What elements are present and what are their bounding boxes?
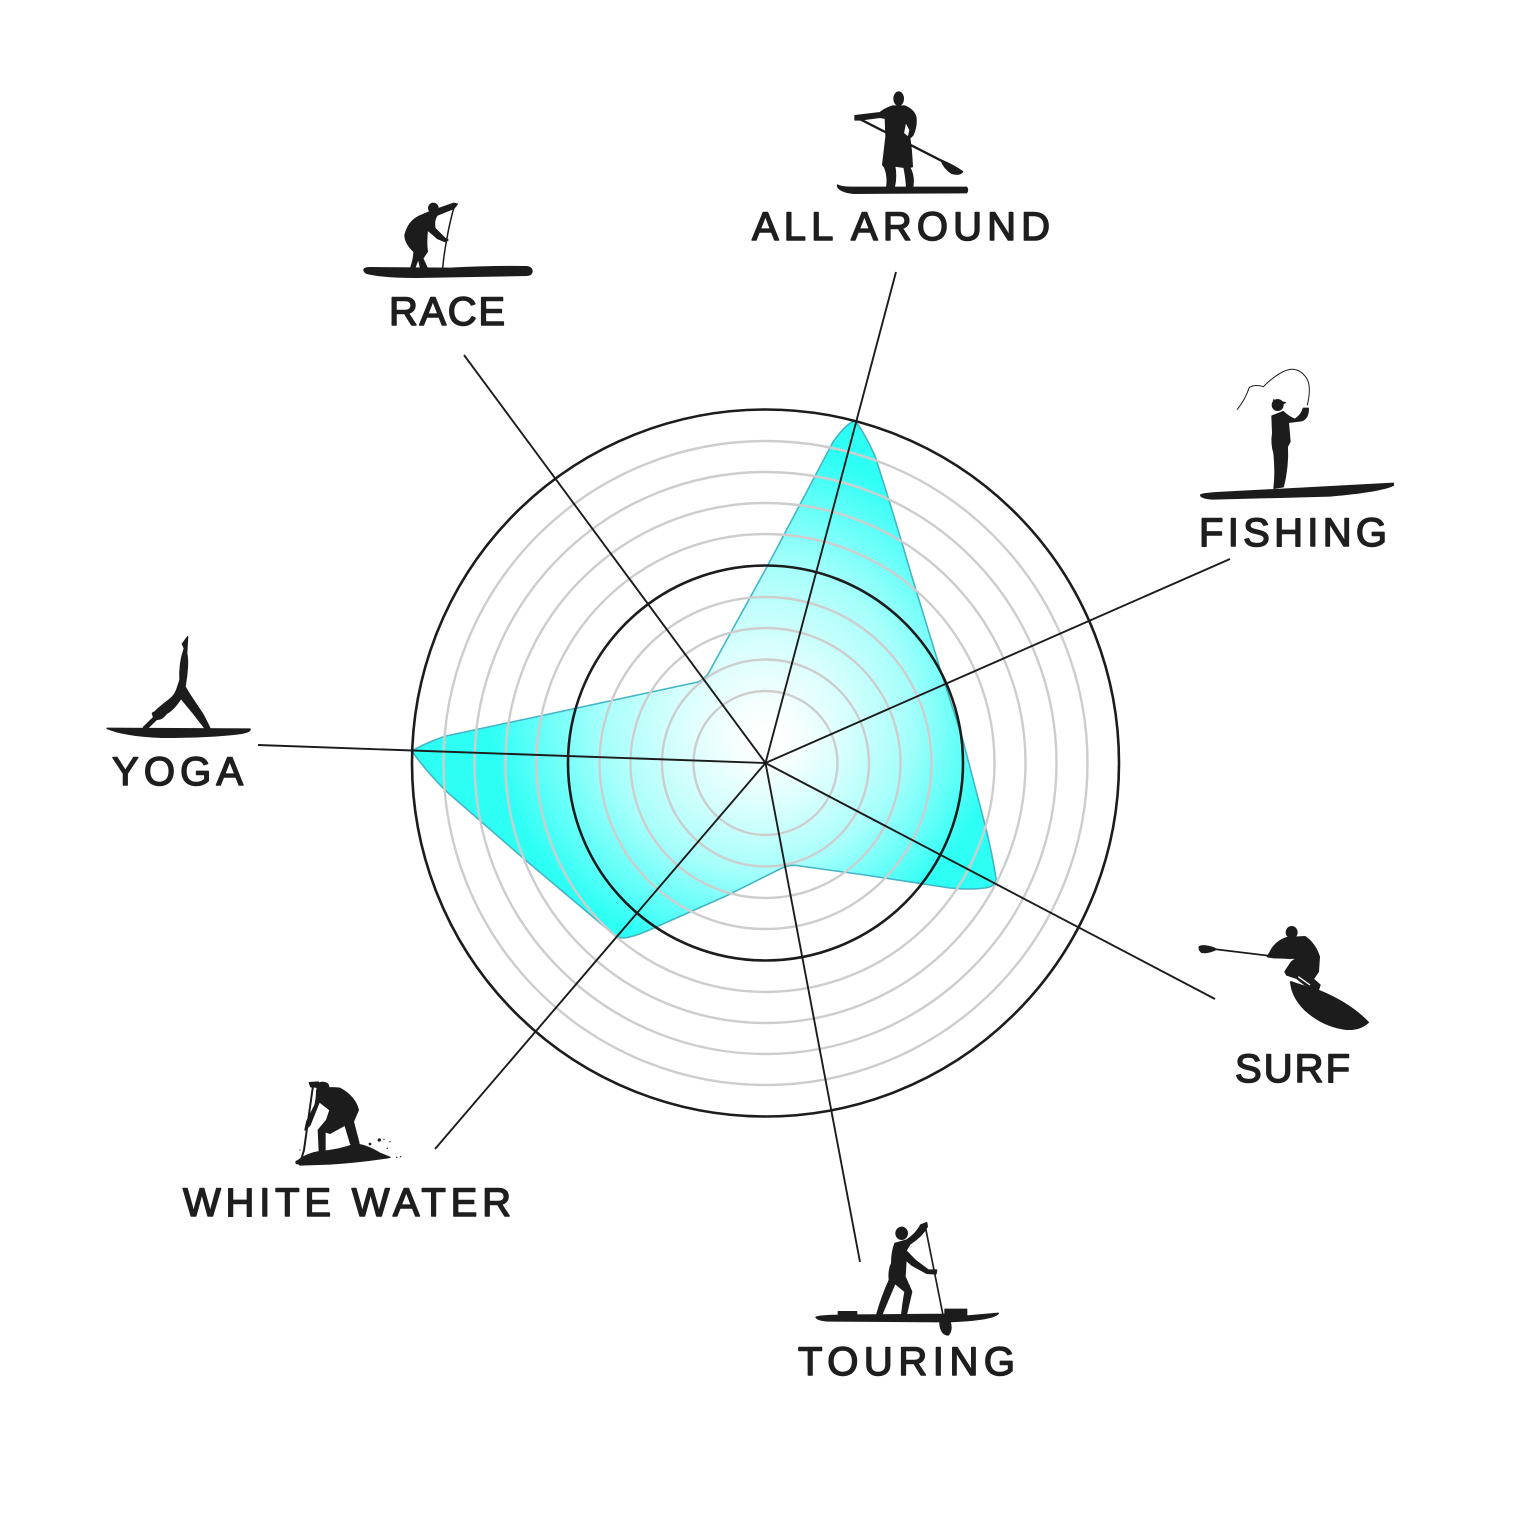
icon: fishing paddler xyxy=(1201,369,1393,499)
label: race: RACE xyxy=(389,290,505,334)
icon: race paddler xyxy=(364,203,532,277)
grey scale rings xyxy=(444,441,1088,1085)
icon: all around paddler xyxy=(838,92,967,193)
black rings xyxy=(412,410,1119,1116)
icon: surf paddler xyxy=(1199,927,1368,1029)
axis lines xyxy=(258,272,1230,1262)
label: surf: SURF xyxy=(1235,1047,1350,1091)
radar chart xyxy=(258,272,1230,1262)
icon: white water paddler xyxy=(295,1082,401,1165)
label: all around: ALL AROUND xyxy=(752,205,1050,249)
radar data shape xyxy=(412,421,996,938)
icon: touring paddler xyxy=(816,1223,998,1335)
label: white water: WHITE WATER xyxy=(183,1181,511,1225)
label: fishing: FISHING xyxy=(1199,511,1387,555)
label: yoga: YOGA xyxy=(112,750,243,794)
icon: yoga pose xyxy=(107,637,250,737)
label: touring: TOURING xyxy=(798,1340,1015,1384)
